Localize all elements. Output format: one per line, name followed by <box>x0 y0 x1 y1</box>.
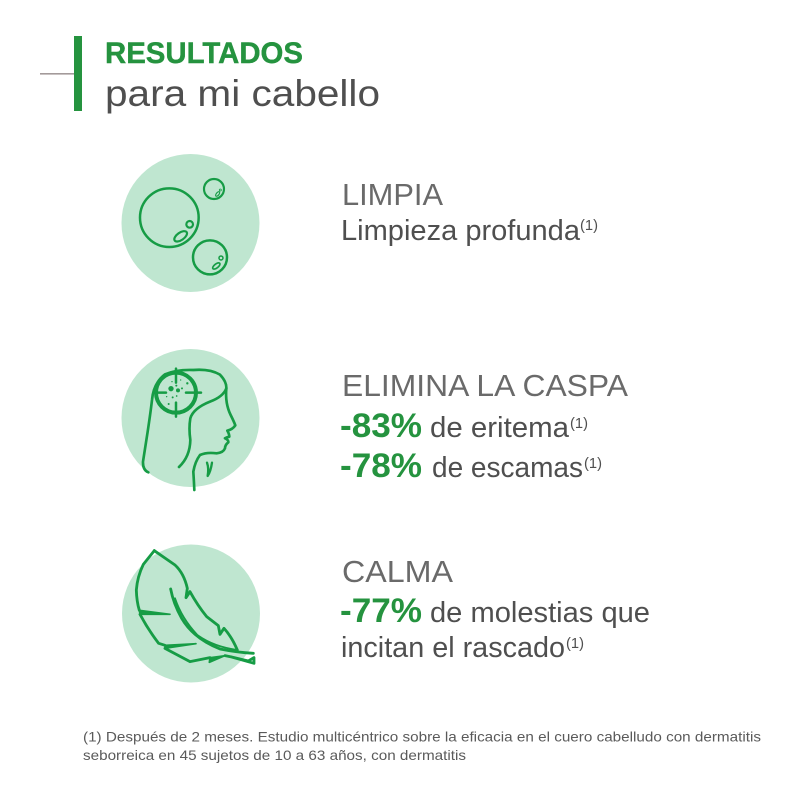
text block: calma: -77% <box>340 592 422 630</box>
header accent bar <box>74 36 82 111</box>
text block: elimina la caspa: ELIMINA LA CASPA <box>342 368 628 403</box>
footnote <box>83 728 761 763</box>
subtitle: para mi cabello <box>105 73 380 114</box>
icon: bubbles <box>122 154 260 292</box>
text block: calma: de molestias que <box>430 597 650 629</box>
icon: feather <box>122 544 260 682</box>
text block: elimina la caspa: de eritema <box>430 412 569 444</box>
title: RESULTADOS: RESULTADOS <box>105 37 303 70</box>
footnote: seborreica en 45 sujetos de 10 a 63 años, con dermatitis <box>83 747 466 763</box>
footnote: (1) Después de 2 meses. Estudio multicéntrico sobre la eficacia en el cuero cabelludo con dermatitis <box>83 728 761 744</box>
text block: elimina la caspa: de escamas <box>432 452 583 484</box>
text block: calma <box>340 554 650 664</box>
text block: calma: CALMA <box>342 554 453 589</box>
text block: limpia <box>341 177 598 247</box>
text block: calma: incitan el rascado <box>341 632 565 664</box>
text block: elimina la caspa: -78% <box>340 447 422 485</box>
text block: limpia: LIMPIA <box>342 177 443 212</box>
icon: head with target <box>122 349 260 490</box>
text block: limpia: (1) <box>580 217 598 234</box>
text block: limpia: Limpieza profunda <box>341 215 580 247</box>
text block: elimina la caspa: (1) <box>584 455 602 472</box>
header <box>40 36 380 114</box>
text block: elimina la caspa <box>340 368 628 485</box>
text block: calma: (1) <box>566 635 584 652</box>
text block: elimina la caspa: (1) <box>570 415 588 432</box>
text block: elimina la caspa: -83% <box>340 407 422 445</box>
